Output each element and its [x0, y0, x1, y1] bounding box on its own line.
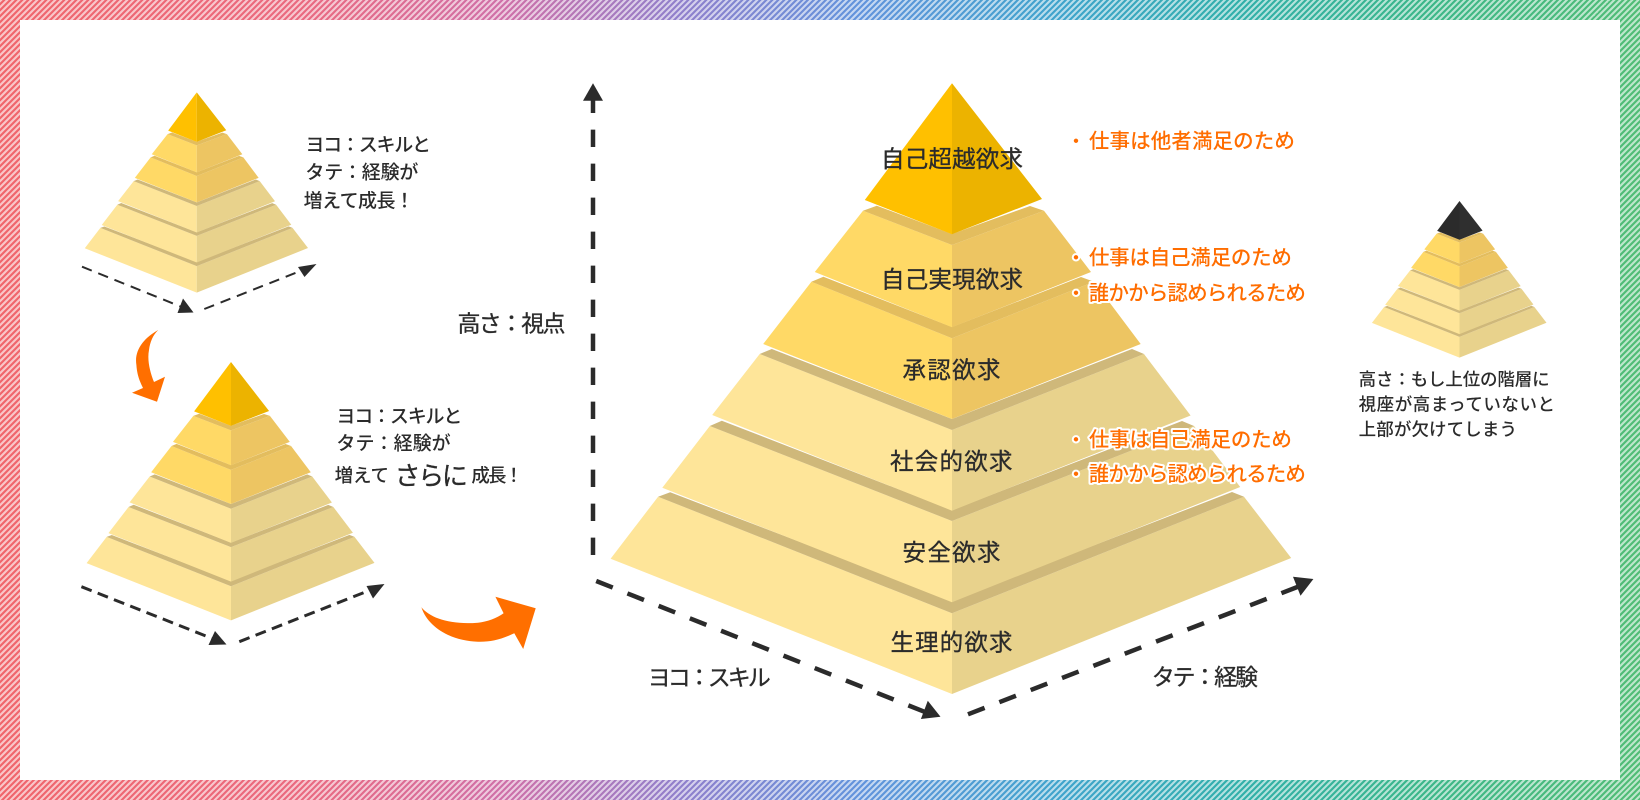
arrow: main height axis: [583, 83, 603, 555]
text: missing top caption: 上部が欠けてしまう: [1359, 420, 1517, 440]
notes: lower tier: [1066, 428, 1306, 486]
layer: esteem needs: [763, 277, 1141, 419]
notes: lower tier: 誰かから認められるため: [1089, 463, 1306, 486]
notes: middle tier: [1066, 246, 1306, 305]
layer: physiological needs: [611, 492, 1291, 694]
arrow: main vertical axis: [968, 577, 1313, 714]
arrow: orange curved right: [421, 597, 536, 649]
label: 自己実現欲求: 自己実現欲求: [881, 266, 1023, 292]
text: missing top caption: [1359, 370, 1555, 440]
arrow: small first pyramid vertical axis: [204, 264, 316, 309]
layer: social needs: [712, 349, 1191, 511]
notes: middle tier: 誰かから認められるため: [1089, 282, 1306, 305]
text: second stage caption: ヨコ：スキルと: [336, 407, 462, 428]
text: second stage caption: [335, 407, 523, 491]
label: タテ：経験: タテ：経験: [1152, 664, 1258, 690]
label: 安全欲求: 安全欲求: [902, 539, 1000, 565]
layer: self-transcendence needs: [865, 83, 1042, 234]
pyramid: main hierarchy of needs: [611, 83, 1291, 694]
text: first stage caption: 増えて成長！: [304, 190, 414, 212]
notes: top tier: 仕事は他者満足のため: [1089, 130, 1295, 153]
text: first stage caption: タテ：経験が: [305, 162, 418, 184]
notes: lower tier: ・: [1066, 465, 1086, 486]
label: 承認欲求: 承認欲求: [902, 357, 1000, 383]
text: second stage caption: 成長！: [471, 465, 523, 486]
arrow: second pyramid horizontal axis: [81, 587, 227, 645]
label: 生理的欲求: 生理的欲求: [890, 630, 1012, 656]
label: 自己超越欲求: 自己超越欲求: [881, 146, 1023, 172]
text: missing top caption: 視座が高まっていないと: [1359, 394, 1555, 414]
layer: self-actualization needs: [815, 206, 1091, 327]
label: height axis: 高さ：視点: [458, 310, 566, 336]
notes: top tier: ・: [1066, 132, 1086, 153]
arrow: main horizontal axis: [596, 581, 940, 719]
notes: middle tier: 仕事は自己満足のため: [1089, 246, 1292, 270]
text: first stage caption: [304, 135, 431, 212]
label: 社会的欲求: 社会的欲求: [890, 448, 1012, 474]
pyramid: small first stage: [85, 92, 308, 293]
text: first stage caption: ヨコ：スキルと: [305, 135, 431, 156]
arrow: orange curved down: [132, 330, 165, 402]
text: second stage caption: 増えて: [335, 465, 389, 486]
text: second stage caption: さらに: [395, 461, 468, 491]
notes: lower tier: 仕事は自己満足のため: [1089, 428, 1292, 452]
arrow: small first pyramid horizontal axis: [82, 267, 194, 313]
pyramid: middle second stage: [87, 362, 374, 620]
text: second stage caption: タテ：経験が: [336, 432, 451, 454]
notes: middle tier: ・: [1066, 284, 1086, 305]
text: missing top caption: 高さ：もし上位の階層に: [1359, 370, 1550, 390]
layer: safety needs: [662, 421, 1240, 602]
pyramid: small with missing black top: [1372, 201, 1546, 358]
arrow: second pyramid vertical axis: [239, 584, 384, 642]
notes: lower tier: ・: [1066, 430, 1086, 452]
label: ヨコ：スキル: ヨコ：スキル: [648, 665, 771, 691]
notes: middle tier: ・: [1066, 248, 1086, 270]
